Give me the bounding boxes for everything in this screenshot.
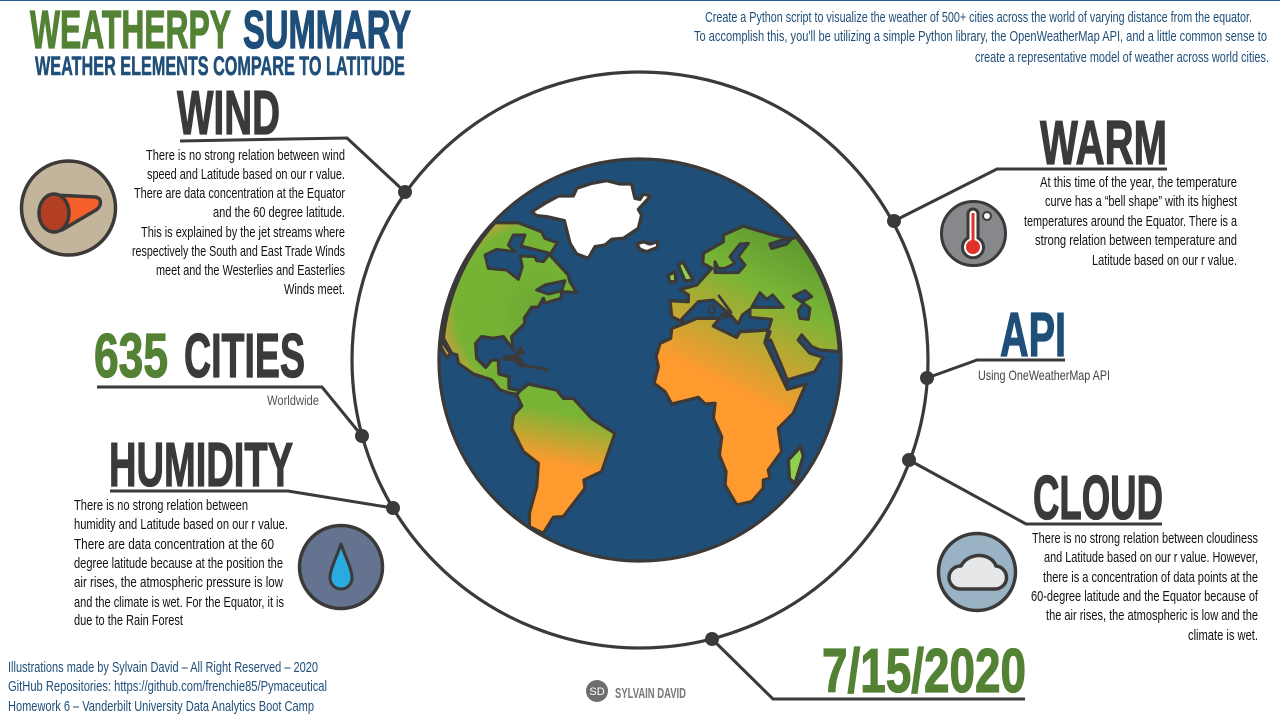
HUMIDITY text: air rises, the atmospheric pressure is low	[74, 574, 283, 591]
WIND connector	[180, 138, 412, 199]
globe	[439, 159, 841, 561]
WIND text: This is explained by the jet streams where	[141, 224, 345, 241]
WIND text: There are data concentration at the Equator	[134, 185, 345, 202]
WIND text: Winds meet.	[284, 281, 345, 298]
HUMIDITY text: due to the Rain Forest	[74, 612, 184, 629]
Sicily	[709, 306, 715, 314]
WARM connector	[887, 169, 1167, 228]
Caribbean islands	[504, 347, 548, 371]
Eurasia	[670, 226, 839, 380]
Alaska strip	[441, 341, 451, 357]
credits	[8, 659, 327, 715]
Iceland	[637, 242, 658, 252]
date connector	[705, 632, 1025, 699]
HUMIDITY text	[74, 497, 288, 629]
South America	[512, 384, 615, 533]
globe outline	[439, 159, 841, 561]
icon: cloud	[938, 534, 1016, 610]
Ireland	[668, 272, 676, 282]
icon: windsock	[22, 161, 116, 255]
WARM text	[1024, 174, 1238, 269]
Hudson Bay	[485, 235, 550, 279]
Red Sea	[765, 340, 787, 387]
Italian coast blob	[719, 311, 732, 318]
subtitle: WEATHER ELEMENTS COMPARE TO LATITUDE	[35, 51, 405, 81]
WIND text: meet and the Westerlies and Easterlies	[156, 262, 345, 279]
WIND text: respectively the South and East Trade Winds	[132, 243, 345, 260]
WARM heading: WARM	[1040, 109, 1167, 178]
logo: Sylvain David: SD	[589, 686, 605, 698]
Britain	[678, 262, 693, 281]
WIND text	[132, 147, 345, 298]
635 CITIES heading: 635	[94, 322, 168, 391]
HUMIDITY heading: HUMIDITY	[109, 431, 293, 500]
CLOUD heading: CLOUD	[1033, 464, 1163, 533]
HUMIDITY text: degree latitude because at the position the	[74, 555, 283, 572]
icon: water drop	[300, 526, 382, 608]
WIND text: speed and Latitude based on our r value.	[147, 166, 345, 183]
API connector	[920, 360, 1065, 385]
CLOUD text: climate is wet.	[1188, 627, 1258, 644]
CLOUD text	[1031, 530, 1259, 644]
HUMIDITY text: and the climate is wet. For the Equator, it is	[74, 594, 284, 611]
CITIES caption: Worldwide	[267, 393, 319, 408]
HUMIDITY text: There are data concentration at the 60	[74, 536, 274, 553]
WIND text: and the 60 degree latitude.	[213, 204, 345, 221]
WIND text: There is no strong relation between wind	[146, 147, 345, 164]
API heading: API	[1000, 301, 1066, 370]
HUMIDITY text: There is no strong relation between	[74, 497, 248, 514]
North America	[443, 223, 577, 395]
HUMIDITY text: humidity and Latitude based on our r value.	[74, 516, 288, 533]
CLOUD connector	[902, 453, 1162, 524]
title: SUMMARY	[243, 0, 411, 60]
Greenland	[532, 181, 651, 258]
Italy	[718, 295, 732, 313]
intro text block	[694, 9, 1269, 66]
WIND heading: WIND	[177, 79, 280, 148]
credits: Illustrations made by Sylvain David – All Right Reserved – 2020	[8, 659, 318, 676]
title: WEATHERPY	[30, 0, 231, 60]
API caption: Using OneWeatherMap API	[978, 367, 1110, 383]
Black Sea	[752, 293, 783, 307]
credits: GitHub Repositories: https://github.com/frenchie85/Pymaceutical	[8, 678, 327, 695]
date heading: 7/15/2020	[822, 637, 1026, 706]
Baltic Sea	[715, 243, 748, 273]
logo: Sylvain David: SYLVAIN DAVID	[615, 685, 686, 702]
CITIES connector	[97, 387, 369, 443]
635 CITIES heading: CITIES	[184, 322, 305, 391]
Caspian Sea	[793, 291, 812, 319]
635 CITIES heading	[94, 322, 305, 391]
Madagascar	[788, 447, 803, 483]
HUMIDITY connector	[110, 491, 400, 515]
Africa	[654, 318, 806, 505]
logo: Sylvain David	[586, 680, 686, 702]
Gulf of St Lawrence	[537, 281, 565, 294]
credits: Homework 6 – Vanderbilt University Data Analytics Boot Camp	[8, 698, 314, 715]
outer ring	[352, 72, 928, 648]
icon: thermometer	[942, 202, 1006, 266]
Mediterranean Sea	[682, 300, 772, 337]
